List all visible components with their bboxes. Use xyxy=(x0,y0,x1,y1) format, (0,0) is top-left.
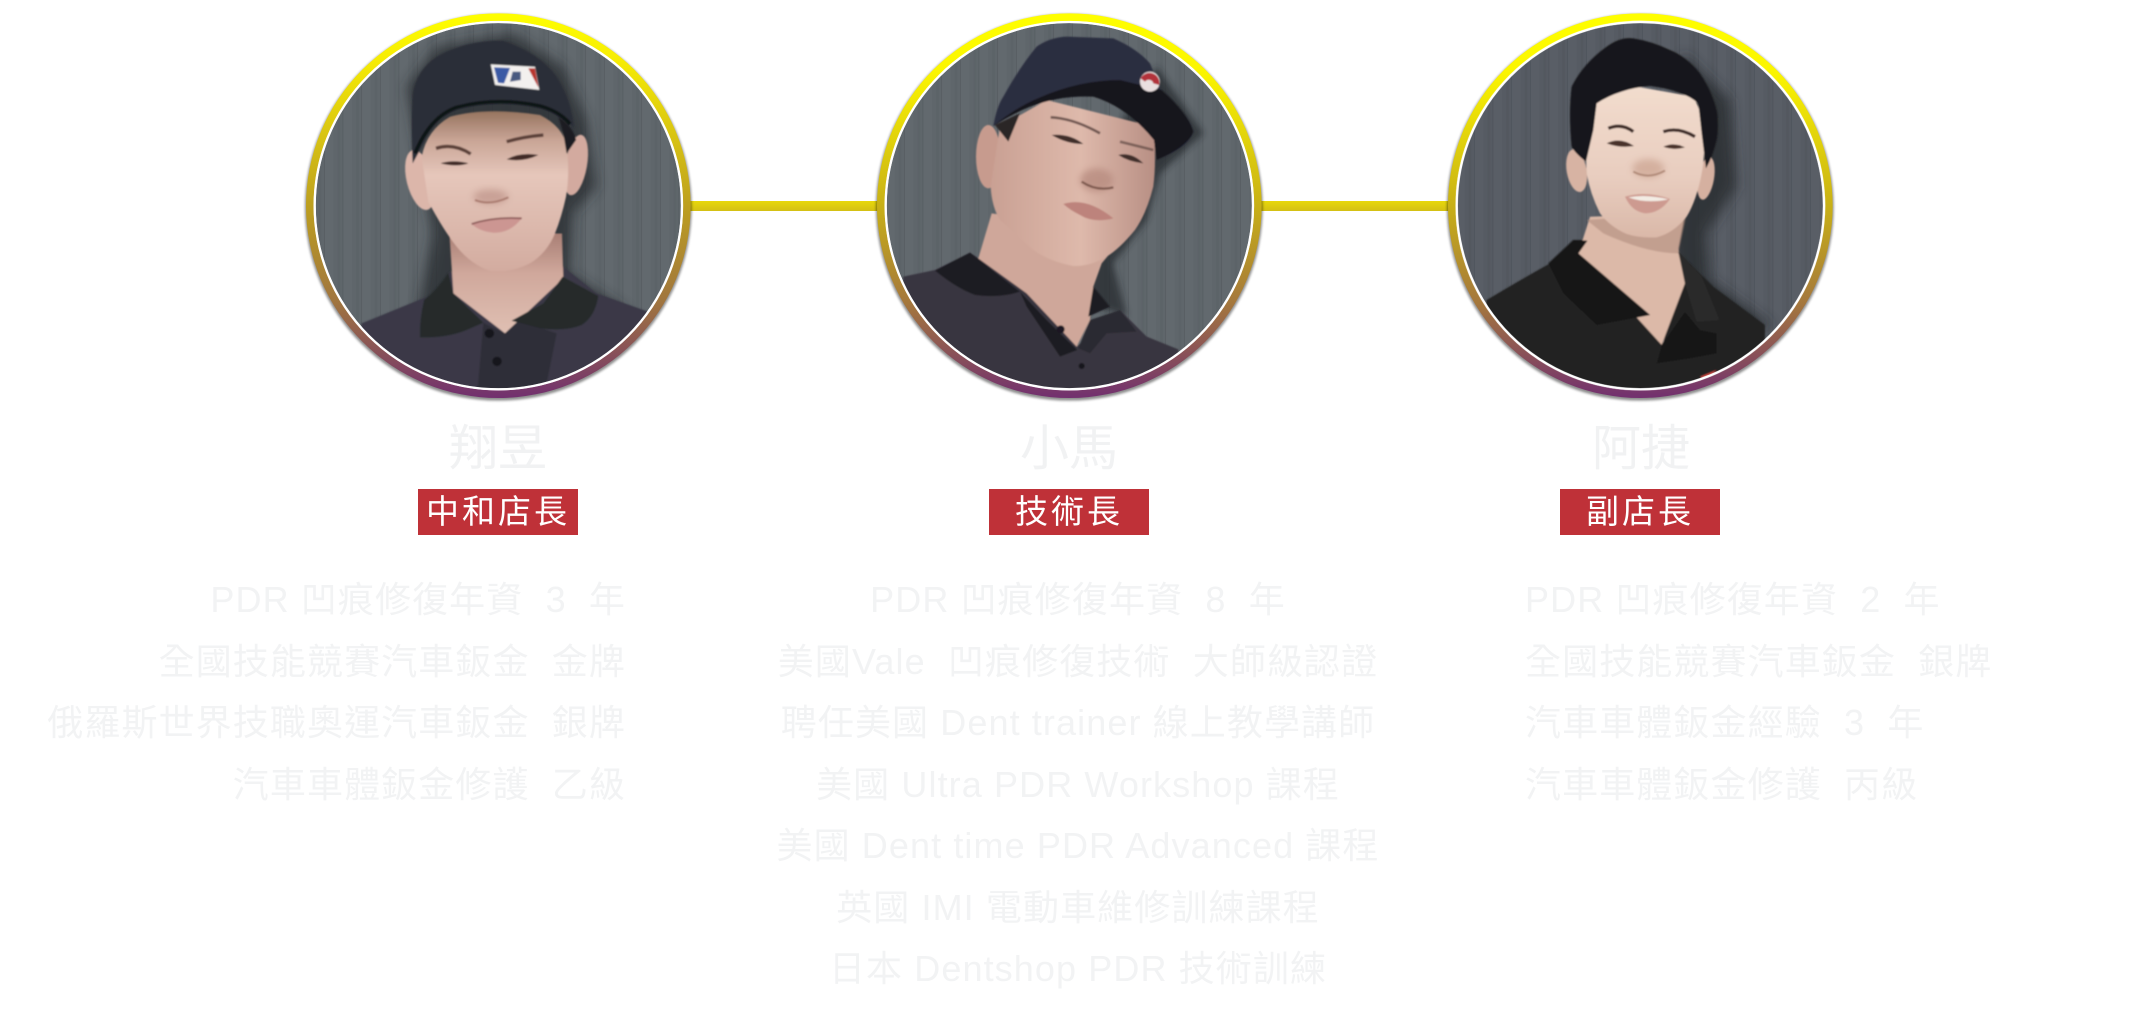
portrait: 小馬 xyxy=(876,13,1263,401)
text block: 小馬 credentials: 美國 Ultra PDR Workshop 課程 xyxy=(816,764,1340,804)
text block: 翔昱 credentials: PDR 凹痕修復年資 3 年 xyxy=(210,579,626,620)
badge: 副店長 xyxy=(1560,489,1720,535)
badge: 副店長: 副店長 xyxy=(1586,493,1694,530)
portraits and connectors xyxy=(303,12,1836,402)
text block: 小馬 credentials: 美國 Dent time PDR Advanced 課程 xyxy=(776,825,1380,866)
connector line: right xyxy=(1259,201,1450,211)
portrait: 阿捷 xyxy=(1447,13,1834,401)
text block: 阿捷 credentials: 汽車車體鈑金修護 丙級 xyxy=(1525,764,1918,804)
text block: 小馬 credentials: 美國Vale 凹痕修復技術 大師級認證 xyxy=(778,640,1378,682)
name: 阿捷: 阿捷 xyxy=(1592,422,1690,476)
text block: 阿捷 credentials: 全國技能競賽汽車鈑金 銀牌 xyxy=(1525,640,1992,682)
text block: 小馬 credentials: PDR 凹痕修復年資 8 年 xyxy=(870,579,1286,620)
text block: 翔昱 credentials xyxy=(47,579,626,804)
name: 小馬: 小馬 xyxy=(1020,422,1118,476)
text block: 翔昱 credentials: 俄羅斯世界技職奧運汽車鈑金 銀牌 xyxy=(47,702,626,743)
connector line: left xyxy=(688,201,880,211)
text block: 小馬 credentials: 聘任美國 Dent trainer 線上教學講師 xyxy=(781,702,1375,743)
badge: 技術長: 技術長 xyxy=(1015,493,1123,530)
badge: 中和店長: 中和店長 xyxy=(426,493,570,530)
name: 翔昱: 翔昱 xyxy=(449,422,547,476)
text block: 小馬 credentials: 日本 Dentshop PDR 技術訓練 xyxy=(829,948,1327,989)
text block: 阿捷 credentials: PDR 凹痕修復年資 2 年 xyxy=(1525,579,1941,620)
text block: 翔昱 credentials: 全國技能競賽汽車鈑金 金牌 xyxy=(159,640,626,682)
portrait: 翔昱 xyxy=(305,13,692,401)
text block: 阿捷 credentials: 汽車車體鈑金經驗 3 年 xyxy=(1525,702,1924,743)
badge: 技術長 xyxy=(989,489,1149,535)
text block: 小馬 credentials: 英國 IMI 電動車維修訓練課程 xyxy=(836,886,1320,928)
text block: 翔昱 credentials: 汽車車體鈑金修護 乙級 xyxy=(233,764,626,804)
text block: 小馬 credentials xyxy=(776,579,1380,989)
text block: 阿捷 credentials xyxy=(1525,579,1992,804)
